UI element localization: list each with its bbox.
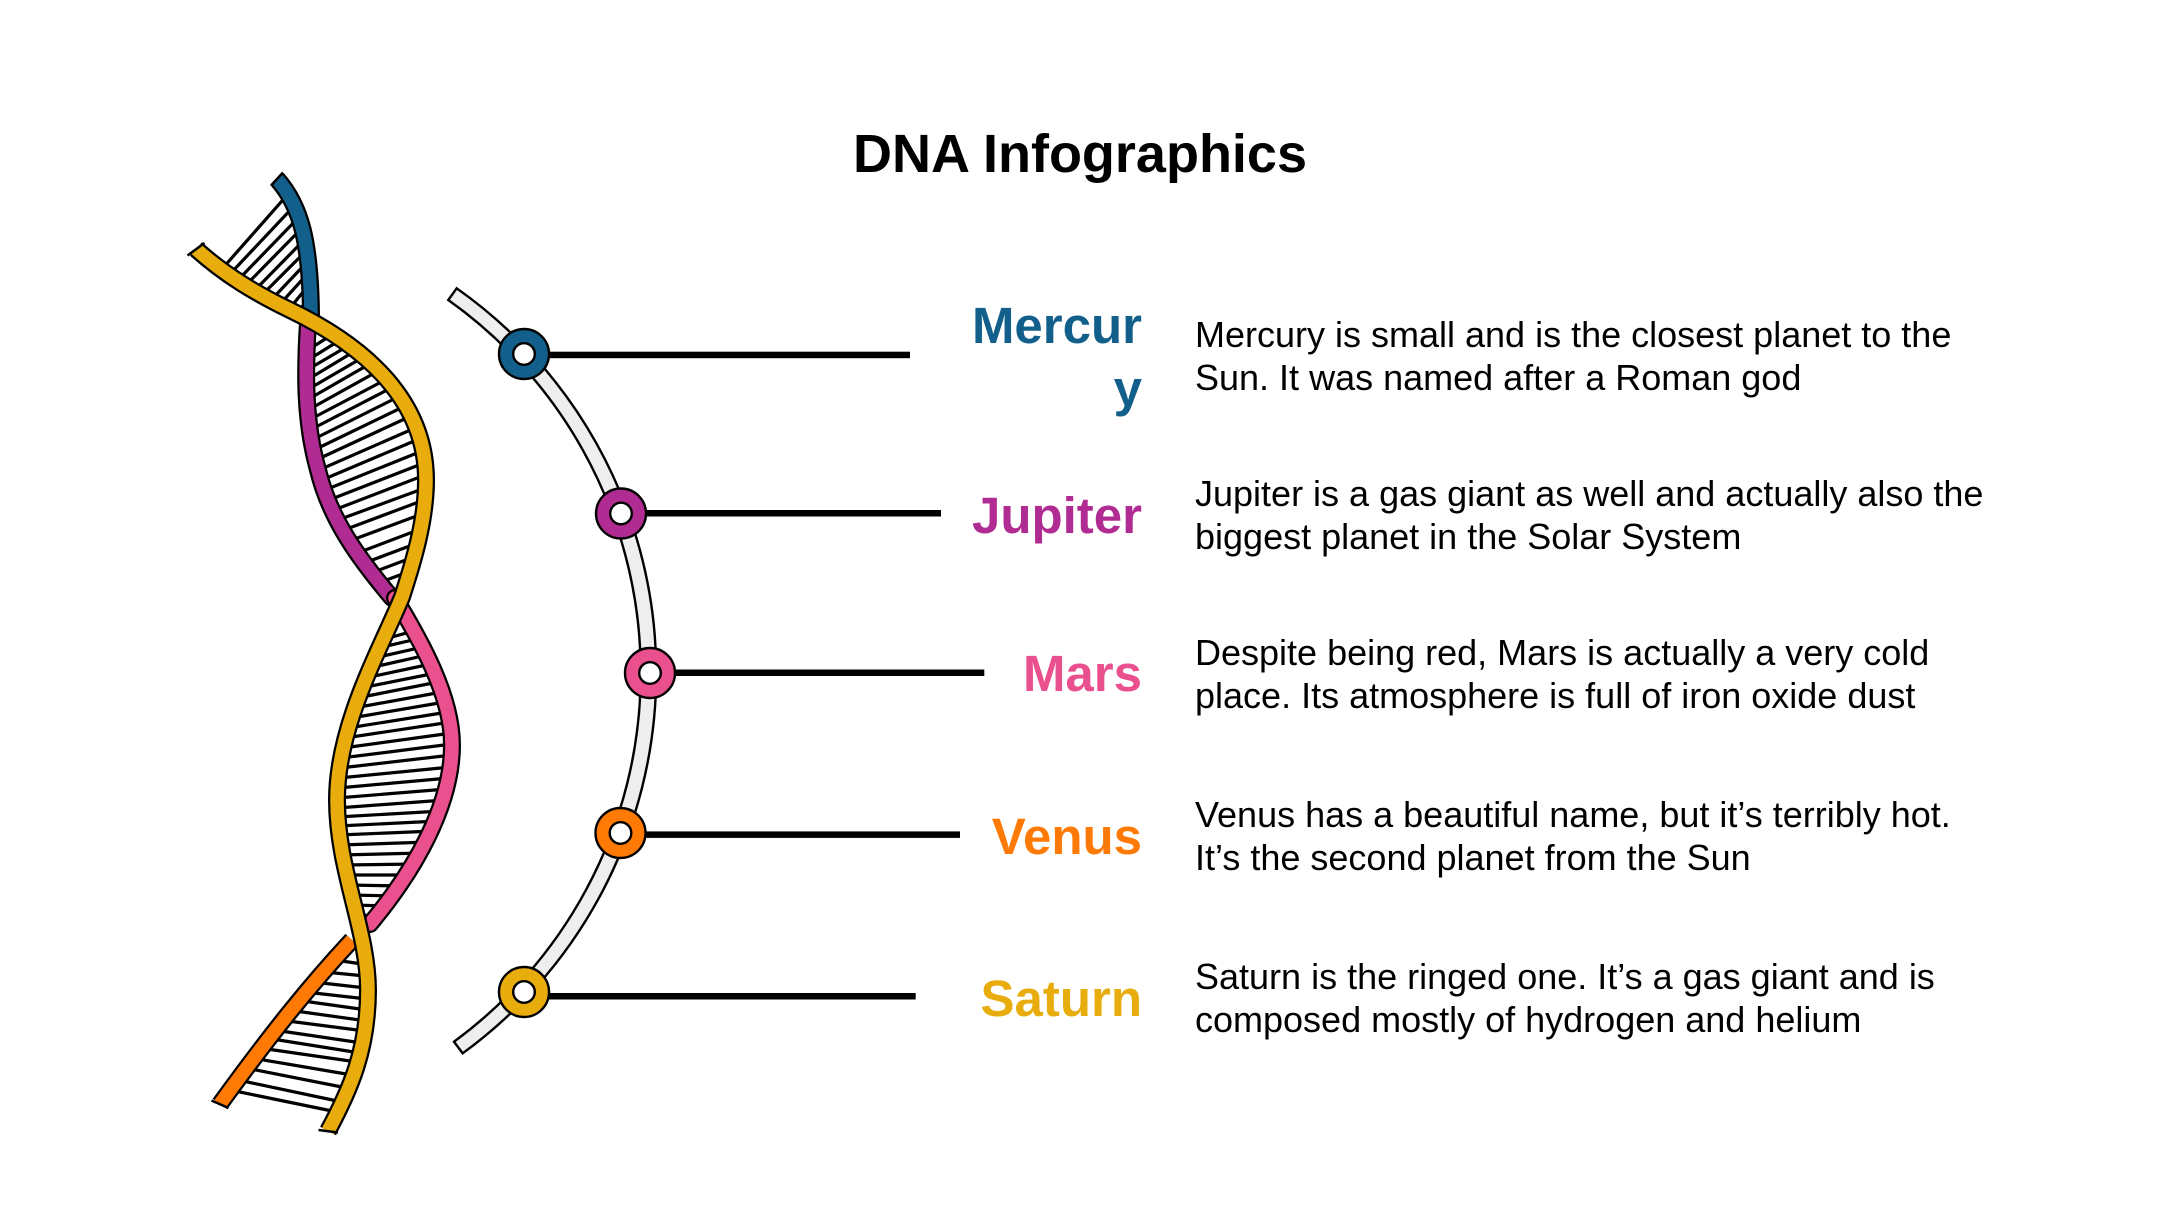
base pair rungs: middle section (337, 632, 452, 916)
description: Mars: Despite being red, Mars is actually a very cold (1195, 632, 1929, 673)
node: Saturn (499, 967, 549, 1017)
node: Mars (625, 648, 675, 698)
label: Venus: Venus (992, 808, 1142, 865)
description: Venus: It’s the second planet from the Sun (1195, 837, 1751, 878)
base pair rungs: lower section (230, 960, 367, 1112)
label: Mercury: Mercury (972, 297, 1142, 417)
base pair rungs: upper section (307, 334, 425, 592)
description: Mercury (1195, 314, 1951, 398)
connector line: Jupiter (621, 510, 941, 516)
strand: yellow (188, 243, 426, 1132)
node: Venus (596, 808, 646, 858)
connector line: Mercury (524, 352, 910, 358)
DNA double helix illustration (188, 172, 452, 1132)
strand: purple (306, 322, 392, 598)
description: Venus: Venus has a beautiful name, but it’s terribly hot. (1195, 794, 1951, 835)
connector line: Mars (650, 670, 984, 676)
label: Saturn: Saturn (980, 970, 1142, 1027)
node: Mercury (499, 329, 549, 379)
connector line: Saturn (524, 993, 916, 1000)
connector line: Venus (620, 831, 960, 838)
base pair rungs: top section (222, 193, 312, 318)
description: Saturn: composed mostly of hydrogen and helium (1195, 999, 1861, 1040)
description: Jupiter: Jupiter is a gas giant as well and actually also the (1195, 473, 1983, 514)
description: Jupiter (1195, 473, 1983, 557)
description: Mars: place. Its atmosphere is full of iron oxide dust (1195, 675, 1915, 716)
label: Jupiter: Jupiter (972, 487, 1142, 544)
strand: orange (212, 940, 352, 1108)
curved track (448, 288, 656, 1053)
description: Venus (1195, 794, 1951, 878)
description: Jupiter: biggest planet in the Solar System (1195, 516, 1741, 557)
description: Saturn (1195, 956, 1935, 1040)
description: Saturn: Saturn is the ringed one. It’s a gas giant and is (1195, 956, 1935, 997)
title: DNA Infographics (853, 124, 1307, 184)
label: Mars: Mars (1023, 645, 1142, 702)
node: Jupiter (596, 488, 646, 538)
description: Mercury: Sun. It was named after a Roman god (1195, 357, 1801, 398)
strand: blue (271, 172, 311, 322)
description: Mercury: Mercury is small and is the closest planet to the (1195, 314, 1951, 355)
strand: pink (370, 598, 452, 924)
description: Mars (1195, 632, 1929, 716)
